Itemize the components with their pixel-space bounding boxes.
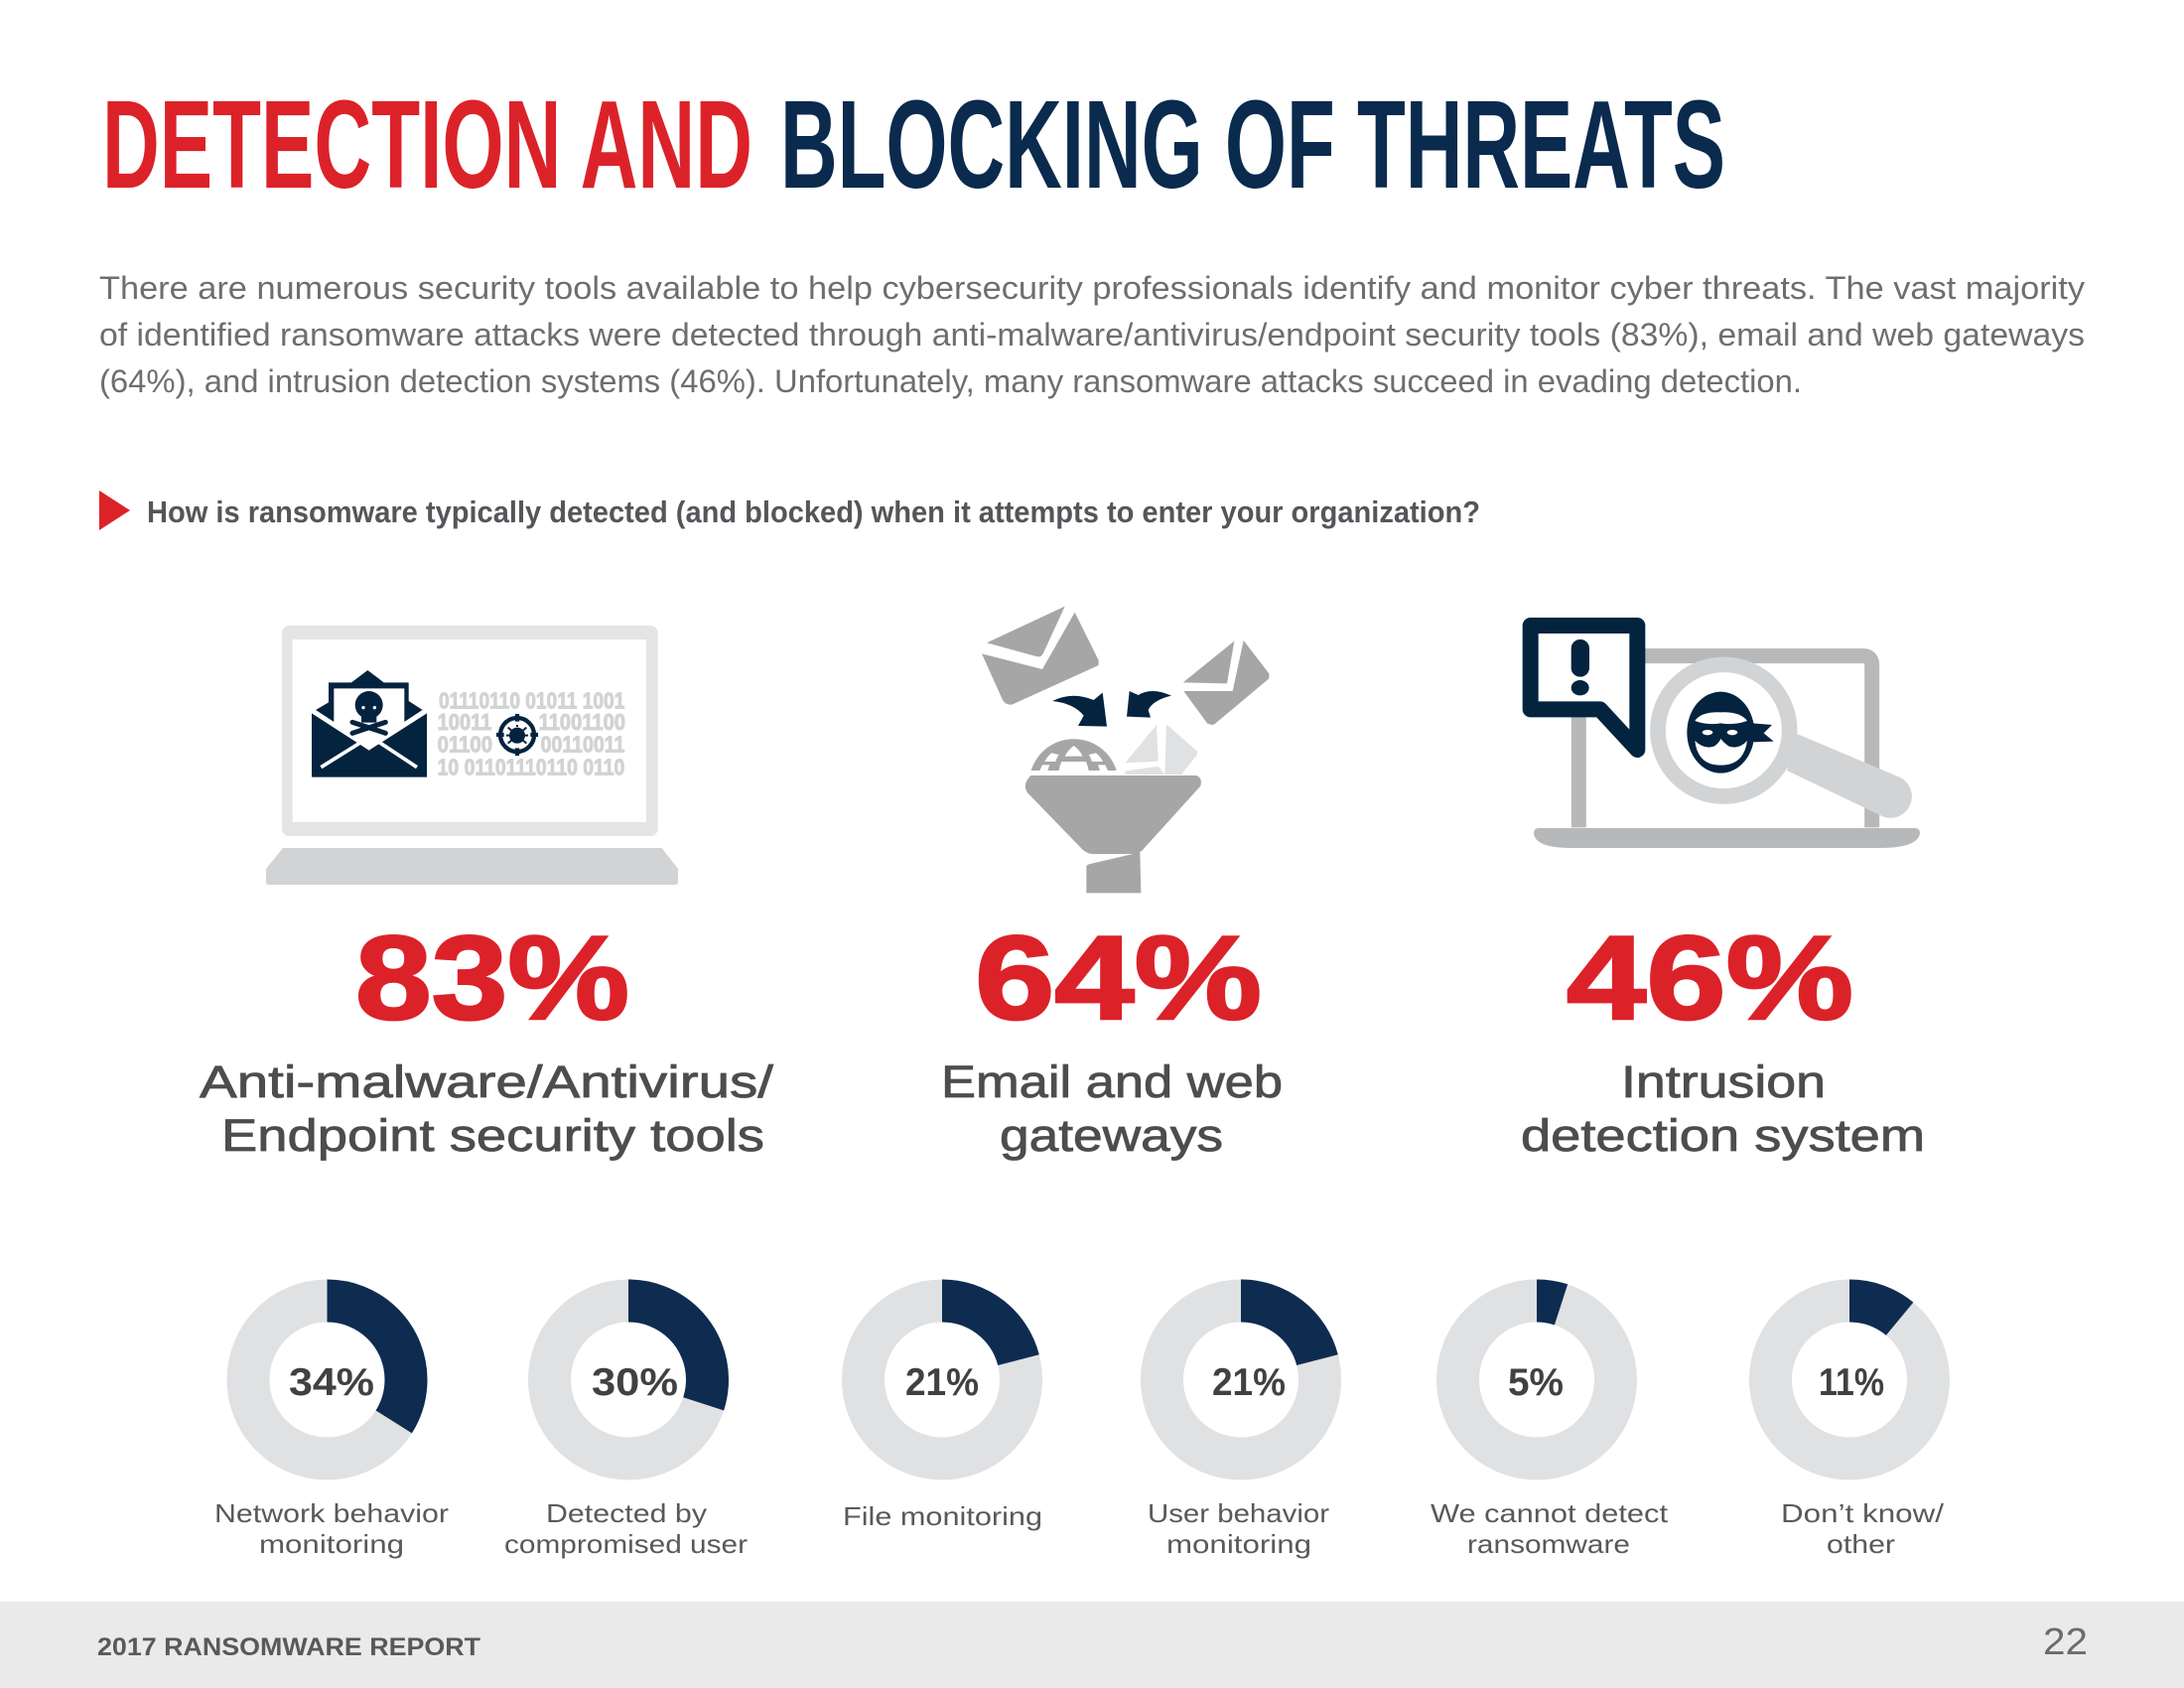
icon: laptop with infected email [266,626,678,885]
donut: file monitoring 21%: File monitoring [843,1501,1042,1531]
donut: we cannot detect ransomware 5%: We cannot detect [1431,1498,1669,1528]
icon: laptop with infected email: 11001100 [539,709,625,735]
donut: user behavior monitoring 21% [1148,1301,1329,1559]
stat: 46%: 46% [1567,912,1853,1045]
donut: network behavior monitoring 34%: Network behavior [214,1498,449,1528]
donut: don't know / other 11%: 11% [1819,1361,1884,1404]
donut: file monitoring 21%: 21% [905,1361,979,1404]
footer band [0,1602,2184,1688]
intro text block: There are numerous security tools available to help cybersecurity professionals identify and monitor cyber threats. The vast majority [99,270,2085,306]
label: email and web gateways: Email and web [941,1056,1283,1107]
donut: network behavior monitoring 34% [214,1301,449,1559]
label: intrusion detection system: Intrusion [1621,1056,1826,1107]
intro text block: (64%), and intrusion detection systems (46%). Unfortunately, many ransomware attacks succeed in evading detection. [99,363,1802,399]
donut: detected by compromised user 30%: compromised user [504,1529,748,1559]
footer band: 2017 RANSOMWARE REPORT [97,1633,480,1661]
donut: network behavior monitoring 34%: monitoring [259,1529,404,1559]
label: intrusion detection system [1521,1056,1925,1161]
label: email and web gateways [941,1056,1283,1161]
label: anti-malware: Anti-malware/Antivirus/ [200,1056,774,1107]
icon: red arrow marker [99,491,130,530]
icon: laptop with magnifier and masked intruder [1531,626,1920,848]
donut: detected by compromised user 30%: Detected by [546,1498,707,1528]
donut: detected by compromised user 30% [504,1301,748,1559]
stat: 83%: 83% [355,912,629,1045]
survey question: How is ransomware typically detected (and blocked) when it attempts to enter your organization? [147,494,1480,529]
icon: laptop with infected email: 10011 [438,709,491,735]
donut: user behavior monitoring 21%: monitoring [1166,1529,1311,1559]
donut: file monitoring 21% [843,1301,1042,1531]
title: DETECTION AND [102,74,752,214]
footer band: 22 [2043,1621,2088,1663]
donut: user behavior monitoring 21%: 21% [1212,1361,1286,1404]
intro text block [99,270,2085,399]
icon: laptop with infected email: 10 01101110110 0110 [438,755,624,780]
label: anti-malware: Endpoint security tools [221,1110,764,1161]
donut: don't know / other 11% [1771,1301,1945,1559]
donut: network behavior monitoring 34%: 34% [289,1361,374,1404]
donut: don't know / other 11%: other [1827,1529,1895,1559]
donut: detected by compromised user 30%: 30% [592,1361,678,1404]
icon: envelopes and globe into funnel [982,607,1269,893]
donut: user behavior monitoring 21%: User behavior [1148,1498,1329,1528]
label: email and web gateways: gateways [1000,1110,1223,1161]
stat: 64%: 64% [975,912,1262,1045]
label: anti-malware [200,1056,774,1161]
title [102,74,1725,214]
icon: laptop with infected email: 01110110 01011 1001 [439,687,624,713]
intro text block: of identified ransomware attacks were detected through anti-malware/antivirus/endpoint security tools (83%), email and web gateways [99,317,2085,352]
donut: don't know / other 11%: Don’t know/ [1781,1498,1945,1528]
donut: we cannot detect ransomware 5% [1431,1301,1669,1559]
donut: we cannot detect ransomware 5%: 5% [1508,1361,1564,1404]
icon: laptop with infected email: 01100 [438,732,492,758]
icon: laptop with infected email: 00110011 [541,732,624,758]
donut: we cannot detect ransomware 5%: ransomware [1467,1529,1630,1559]
label: intrusion detection system: detection system [1521,1110,1925,1161]
